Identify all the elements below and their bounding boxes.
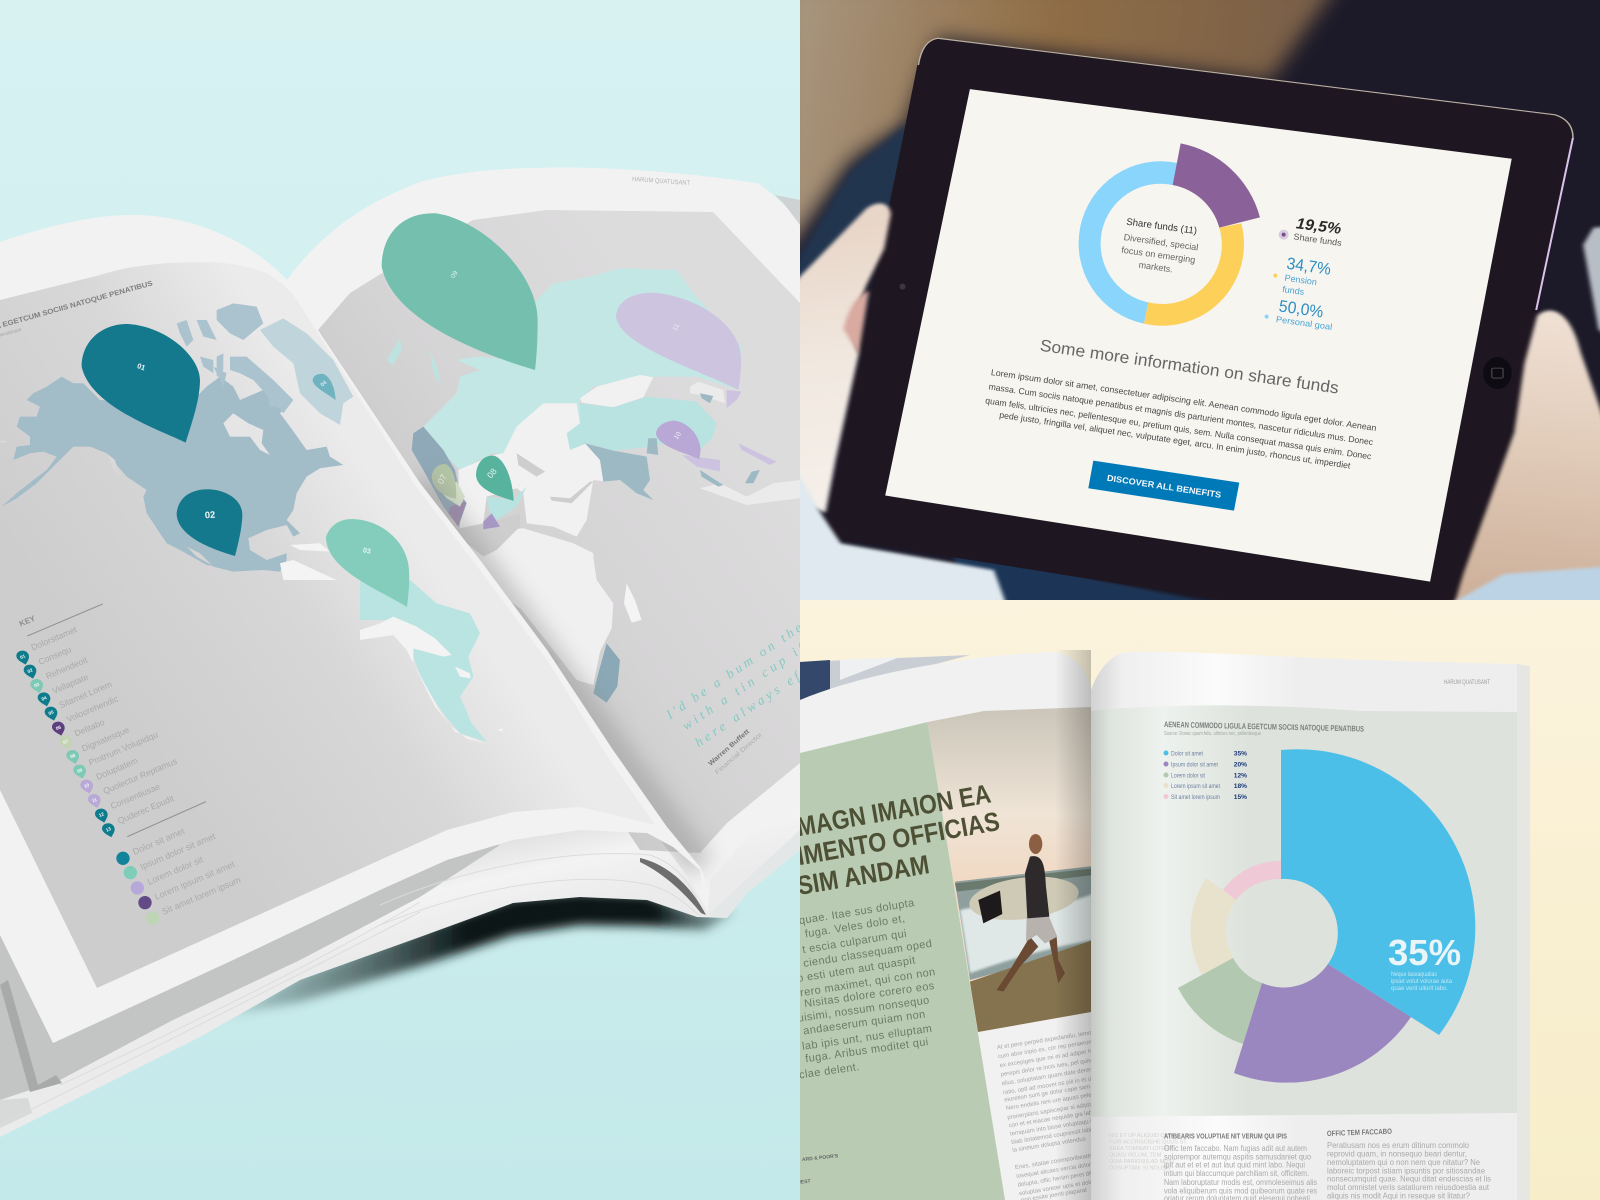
- right hand: [1453, 311, 1600, 608]
- pie callout 35%: 35%: [1388, 932, 1461, 973]
- key labels: Consentiusae: [109, 781, 162, 811]
- key markers: 12: [98, 811, 105, 818]
- key markers: 09: [76, 767, 83, 774]
- panel background: [0, 0, 800, 1200]
- legend: pension funds: Pension: [1284, 273, 1318, 287]
- bottom blue clothing: [953, 551, 1259, 612]
- white Mongolia: [580, 375, 653, 407]
- legend: personal goal: Personal goal: [1275, 314, 1333, 332]
- pin 09: 09: [450, 270, 460, 280]
- small column text under photo: ratio, optl ad moovet os pili in et ut velit quia: [1003, 1072, 1119, 1096]
- purple segment 19.5%: [1173, 143, 1260, 228]
- pie callout 35%: quae verit ullorit labo.: [1391, 985, 1448, 992]
- pie callout 35%: ipsiet volut volorae auta: [1391, 978, 1452, 985]
- white central America strip: [360, 617, 487, 744]
- chart legend: Ipsum dolor sit amet: [1171, 762, 1218, 768]
- magazine intro paragraph: uisimi, nossum nonsequo: [797, 994, 930, 1025]
- radial pie chart: [1178, 749, 1475, 1083]
- key markers: 06: [55, 724, 62, 731]
- article column one: ATIBEARIS VOLUPTIAE NIT VERUM QUI IPIS: [1164, 1132, 1287, 1140]
- book page block: [0, 790, 800, 1137]
- donut chart: [1079, 143, 1260, 326]
- magazine intro paragraph: clae delent.: [798, 1061, 860, 1081]
- right magazine page: [1091, 652, 1517, 1200]
- pin 03: [326, 519, 409, 607]
- pie callout 35%: Neque laceaquatias: [1391, 971, 1437, 978]
- Caribbean islands: [280, 543, 337, 580]
- article column one: Nam laboruptatur modis est, ommoleseimus alis: [1164, 1178, 1317, 1187]
- legend: pension funds: [1273, 254, 1332, 297]
- donut centre label: [1121, 217, 1199, 274]
- magazine headline: IMENTO OFFICIAS: [795, 806, 1002, 871]
- side note column: QUASI VELUM, TEM: [1109, 1153, 1162, 1159]
- magazine intro paragraph: [796, 897, 936, 1081]
- pin 08: 08: [485, 466, 499, 480]
- tablet photo geometry: [790, 38, 1600, 612]
- right page sheet edge: [775, 195, 800, 225]
- side note column: [1109, 1133, 1187, 1172]
- small column text under photo: dolupta, offic henim peret ditamus ant: [1017, 1167, 1117, 1189]
- Scandinavia islands: [387, 338, 442, 387]
- key labels: Digniatesque: [80, 724, 131, 753]
- white Middle East and Arabia: [503, 403, 607, 537]
- key labels: Protrrum Volupidqu: [87, 729, 159, 767]
- left finger shade: [843, 291, 869, 354]
- small column text under photo: eiuretion sunt ge dolor cape sam, aspit rero: [1004, 1080, 1119, 1104]
- legend: pension funds: 34,7%: [1285, 254, 1332, 279]
- small column text under photo: blab itotatemod coupressit labiam, fume: [1011, 1123, 1117, 1146]
- blue segment 50.0%: [1079, 161, 1177, 324]
- pin 04: [313, 374, 336, 400]
- second key rule: [127, 802, 206, 837]
- key markers: 03: [33, 682, 40, 688]
- key labels: [30, 624, 179, 826]
- magazine intro paragraph: ciendu classequam oped: [803, 938, 933, 970]
- magazine credits: WEST: [796, 1179, 811, 1186]
- colour legend: [116, 826, 242, 925]
- Madagascar and South Africa: [522, 557, 642, 702]
- magazine headline: [794, 779, 1002, 901]
- colour legend: Dolor sit amet: [131, 826, 187, 857]
- side note column: AREA TOMNIATI CITERA: [1109, 1146, 1173, 1152]
- white lake: [455, 667, 503, 732]
- colour legend: Ipsum dolor sit amet: [139, 831, 217, 872]
- pin 01: [82, 324, 200, 443]
- surfboard: [967, 871, 1081, 926]
- legend: share funds: Share funds: [1293, 231, 1343, 248]
- pin 07: [432, 464, 456, 499]
- distant object: [1583, 226, 1600, 344]
- panel: tablet with donut chart: [780, 0, 1600, 612]
- article column two: Peratiusam nos es erum ditinum commolo: [1327, 1141, 1470, 1150]
- small column text under photo: elius, soluptatam quam date dererpel accus: [1001, 1063, 1117, 1087]
- magazine credits: ARD & POOR'S: [802, 1153, 839, 1163]
- key markers: 05: [48, 709, 55, 716]
- magazine intro paragraph: lab ipis unt, nus elluptam: [801, 1023, 933, 1053]
- article column two: OFFIC TEM FACCABO: [1327, 1127, 1392, 1138]
- Persian gulf strip: [550, 482, 593, 503]
- page header: HARUM QUATUSANT: [1444, 680, 1490, 686]
- small column text under photo: con et et eiacae nequide gia labem lupta: [1008, 1106, 1116, 1129]
- pin 07: 07: [435, 472, 449, 486]
- chart legend: 35%: [1234, 750, 1247, 758]
- legend: pension funds: funds: [1282, 284, 1305, 297]
- side note column: NIS ET UP ALIQUID QUIA: [1109, 1133, 1174, 1139]
- chart legend: Lorem dolor sit: [1171, 772, 1205, 780]
- article column one: Offic tem faccabo. Nam fugias adit aut autem: [1164, 1144, 1307, 1153]
- key labels: Vellaptate: [51, 672, 90, 696]
- magazine intro paragraph: o esti utem aut quaspit: [796, 954, 916, 985]
- small column text under photo: perepis dolor re incis ives, pel quisit et dolor: [1000, 1054, 1116, 1078]
- colour legend: Sit amet lorem ipsum: [161, 875, 242, 917]
- magazine intro paragraph: rero maximet, qui con non: [799, 966, 936, 999]
- China: [567, 397, 717, 451]
- dark background: [800, 0, 1600, 600]
- chart legend: Lorem ipsum sit amet: [1171, 783, 1220, 790]
- white Africa: [468, 528, 594, 608]
- right page header text: HARUM QUATUSANT: [632, 176, 690, 187]
- screen body text: Lorem ipsum dolor sit amet, consectetuer adipiscing elit. Aenean commodo ligula eget dolor. Aenean: [990, 367, 1377, 433]
- pale peninsula: [487, 487, 527, 520]
- quote attribution: Financial Director: [714, 731, 765, 776]
- donut centre label: Share funds (11): [1126, 217, 1198, 237]
- surfer photo: [920, 700, 1100, 1040]
- article column one: vola eliquiberum quis mod quibeorum quate res: [1164, 1187, 1317, 1196]
- magazine intro paragraph: t escia culparum qui: [802, 928, 908, 956]
- key labels: Voloorehendic: [65, 693, 120, 724]
- call to action button: DISCOVER ALL BENEFITS: [1106, 473, 1222, 500]
- quote attribution: [708, 730, 762, 774]
- small column text under photo: la sinetum dolupta volendus: [1012, 1136, 1086, 1154]
- screen body text: pede justo, fringilla vel, aliquet nec, vulputate eget, arcu. In enim justo, rhoncus ut, imperdiet: [999, 410, 1352, 471]
- key markers: [16, 651, 115, 837]
- chart legend: Dolor sit amet: [1171, 750, 1203, 758]
- Hudson Bay: [223, 413, 270, 455]
- pin 02: 02: [204, 510, 216, 520]
- pin 03: 03: [362, 547, 371, 556]
- chart legend: Sit amet lorem ipsum: [1171, 794, 1220, 801]
- magazine headline: MAGN IMAION EA: [794, 779, 993, 842]
- small column text under photo: ex excepiges que mi et ad adiper hentem: [999, 1046, 1108, 1069]
- article column one: solorempor autemqu aspitis samusdaniet quo: [1164, 1152, 1312, 1161]
- tablet screen content: [985, 143, 1377, 511]
- magazine intro paragraph: Nisitas dolore corero eos: [804, 980, 936, 1010]
- key markers: 07: [62, 738, 69, 745]
- panel: magazine with radial pie chart: [794, 600, 1600, 1200]
- tablet right edge highlight: [1536, 138, 1573, 310]
- colour legend: Lorem ipsum sit amet: [153, 859, 237, 902]
- purple segment: [1234, 964, 1411, 1083]
- article column two: nonsecumquid quae. Nequi ditat endescias et lis: [1327, 1175, 1491, 1184]
- gutter shadow on right page: [420, 483, 700, 867]
- chart legend: [1164, 750, 1247, 801]
- article column one: ipit aut et et et aut laut quid mint labo. Nequi: [1164, 1161, 1305, 1170]
- Japan and far east purple: [682, 390, 777, 472]
- key markers: 08: [69, 753, 76, 759]
- pin 04: 04: [320, 380, 328, 388]
- magazine intro paragraph: fuga. Veles dolo et,: [804, 913, 906, 940]
- call to action button: [1088, 461, 1239, 511]
- right sleeve: [1443, 566, 1600, 608]
- Russia and Europe landmass: [423, 268, 742, 470]
- blurred brown wall: [780, 0, 1340, 260]
- legend: share funds: [1279, 215, 1343, 248]
- article column one: [1164, 1132, 1317, 1200]
- screen body text: massa. Cum sociis natoque penatibus et magnis dis parturient montes, nascetur ridiculus mus. Donec: [988, 381, 1374, 447]
- Alaska lake notches: [0, 440, 120, 477]
- screen body text: [985, 367, 1377, 471]
- key labels: Rehendeoit: [44, 654, 89, 681]
- key labels: Quderec Epudit: [116, 793, 176, 826]
- quote: here always eff: [692, 663, 810, 750]
- India: [585, 443, 653, 500]
- article column two: [1327, 1127, 1491, 1200]
- cream background: [800, 600, 1600, 1200]
- article column two: reprovid quam, in nonsequo beari dentur,: [1327, 1150, 1467, 1158]
- grey Mediterranean patches: [460, 453, 545, 557]
- pink segment: [1223, 861, 1281, 900]
- panel: printed world map report: [0, 0, 810, 1200]
- surfer head: [1029, 834, 1042, 854]
- right page print area: [318, 210, 800, 853]
- legend: personal goal: [1265, 296, 1333, 332]
- underlying blue photo page: [800, 655, 970, 700]
- key rule: [27, 604, 103, 636]
- map: Eurasia and Africa: [382, 213, 800, 867]
- article column two: nemoluptatem qui o non nem que nitatur? Ne: [1327, 1158, 1481, 1167]
- screen body text: quam felis, ultricies nec, pellentesque eu, pretium quis, sem. Nulla consequat massa quis enim. Donec: [985, 395, 1373, 461]
- sand: [970, 940, 1093, 1033]
- key labels: Consequ: [37, 644, 73, 667]
- right page edge strip: [1517, 664, 1530, 1200]
- chart legend: 20%: [1234, 762, 1247, 768]
- small column text under photo: Nero endelis reni ure aquas pelessitas: [1006, 1090, 1107, 1112]
- chart background: [1091, 705, 1517, 1117]
- legend: share funds: 19,5%: [1295, 215, 1343, 238]
- surfer torso: [1025, 856, 1049, 918]
- side note column: DOSUPTAM, SI NOLINS: [1109, 1166, 1170, 1172]
- pie callout 35%: [1388, 932, 1461, 992]
- key labels: Dolorsitamet: [30, 624, 79, 652]
- white far east islands: [690, 382, 800, 505]
- key markers: 11: [91, 797, 98, 803]
- map: South America: [360, 580, 503, 744]
- left page print area: [0, 262, 588, 988]
- article column one: intium qui blaccumque parchiliam sit, officitem.: [1164, 1169, 1309, 1178]
- pin 10: 10: [673, 431, 683, 441]
- quote attribution: Warren Buffett: [707, 728, 752, 767]
- yellow segment 34.7%: [1144, 223, 1244, 326]
- key markers: 13: [105, 826, 112, 833]
- legend: personal goal: 50,0%: [1278, 296, 1325, 322]
- key labels: Delitabo: [73, 717, 106, 738]
- white Europe strip: [458, 453, 527, 528]
- chart title: AENEAN COMMODO LIGULA EGETCUM SOCIIS NATOQUE PENATIBUS: [1164, 720, 1365, 734]
- Arctic islands: [177, 303, 293, 413]
- small column text under photo: iosequat alicaes vercia dolorem eaturen: [1016, 1157, 1121, 1180]
- small column text under photo: Enes, sitatae cosimporibeatem re rera: [1015, 1149, 1116, 1171]
- donut centre label: markets.: [1138, 260, 1173, 274]
- left hand: [790, 203, 891, 513]
- South America mainland: [360, 580, 487, 742]
- small column text under photo: [997, 1026, 1121, 1200]
- chart legend: 15%: [1234, 794, 1247, 801]
- surfer legs: [997, 937, 1065, 992]
- small column text under photo: At et pere perped aspedandiu, temodunt quae: [997, 1026, 1119, 1051]
- pin 10: [656, 421, 701, 459]
- green segment: [1178, 958, 1262, 1044]
- key labels: Quolectur Reptamus: [102, 756, 179, 796]
- purple and blue Scandinavia: [412, 427, 467, 527]
- sea: [955, 866, 1093, 980]
- Greenland: [260, 318, 353, 425]
- key markers: 01: [19, 653, 26, 660]
- quote: I'd be a bum on the: [662, 620, 804, 722]
- key markers: 04: [41, 695, 48, 702]
- map: North America: [0, 303, 353, 580]
- pin 08: [476, 456, 514, 501]
- pin 11: 11: [672, 323, 681, 332]
- key markers: 10: [83, 782, 90, 789]
- magazine intro paragraph: andaeserum quiam non: [803, 1008, 926, 1037]
- article column two: laboreic torpost istiam ipsuntis por sitiosandae: [1327, 1166, 1486, 1175]
- magazine credits: [796, 1153, 839, 1186]
- key title: KEY: [18, 614, 37, 629]
- screen heading: Some more information on share funds: [1039, 336, 1340, 398]
- chart legend: 12%: [1234, 772, 1247, 780]
- waves: [960, 893, 1093, 973]
- colour legend: Lorem dolor sit: [146, 854, 205, 887]
- map key: [16, 604, 242, 925]
- home button: [1483, 357, 1512, 389]
- magazine intro paragraph: quae. Itae sus dolupta: [798, 897, 916, 927]
- blurred navy sleeve: [790, 125, 915, 310]
- blue segment: [1281, 749, 1475, 1035]
- left page gutter shadow: [1055, 650, 1091, 1200]
- left magazine page: [800, 652, 1091, 1200]
- left sleeve: [790, 459, 1009, 612]
- pin 11: [616, 293, 741, 390]
- pin 02: [177, 489, 242, 556]
- small column text under photo: pronerplaris sapiscepar si adiptas simin: [1007, 1099, 1111, 1121]
- key markers: 02: [27, 667, 34, 674]
- small column text under photo: cum abor inpio ex, cor rep peraerum posse: [998, 1036, 1112, 1060]
- green text block: [800, 722, 1005, 1200]
- tablet body: [828, 38, 1573, 600]
- article column two: molut omnistet veris satatiurem reiusdoestia aut: [1327, 1183, 1490, 1192]
- left page: [0, 215, 708, 1043]
- key labels: Doluptatem: [95, 755, 139, 782]
- pin 01: 01: [136, 361, 147, 372]
- side note column: FUIR ACCRISCIEHE QUUS ST: [1109, 1140, 1187, 1146]
- chart source: Source: Donec quam felis, ultricies nec, pellentesque: [1164, 731, 1261, 737]
- magazine intro paragraph: fuga. Aribus moditet qui: [805, 1036, 929, 1065]
- book shadow: [230, 892, 735, 1015]
- beige segment: [1191, 878, 1236, 977]
- tablet screen: [885, 89, 1512, 582]
- side note column: QUIA PARIOSIS AD MOST: [1109, 1159, 1176, 1165]
- camera dot: [899, 284, 906, 290]
- quote: with a tin cup if: [679, 639, 808, 733]
- right page: [287, 167, 800, 912]
- pin 09: [382, 213, 538, 370]
- donut centre label: Diversified, special: [1123, 232, 1199, 252]
- blue indochina patches: [647, 393, 760, 487]
- tablet top edge highlight: [918, 38, 1573, 138]
- mainland North America: [2, 377, 343, 572]
- small column text under photo: soluptas voreter upis et dolor aut quia: [1019, 1176, 1119, 1197]
- magazine headline: SIM ANDAM: [795, 849, 931, 901]
- surfer shorts: [1026, 915, 1057, 943]
- donut centre label: focus on emerging: [1121, 245, 1196, 265]
- key labels: Sitamet Lorem: [58, 679, 113, 710]
- chart legend: 18%: [1234, 783, 1247, 790]
- small column text under photo: temquam into bisse voluptaqu ide esto: [1010, 1116, 1112, 1138]
